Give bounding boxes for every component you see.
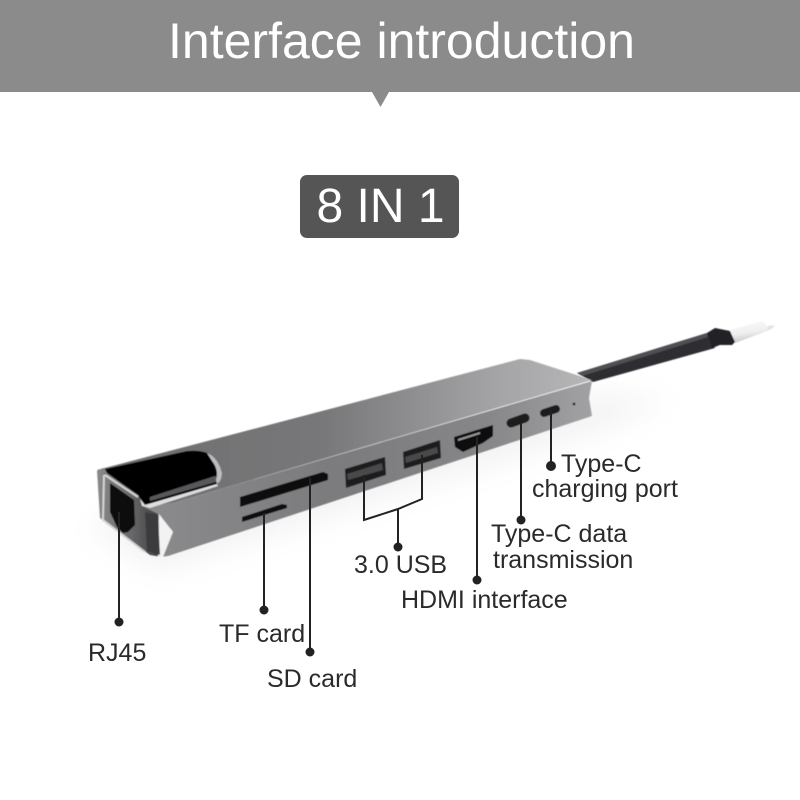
Type-C port data bbox=[511, 418, 525, 423]
label: SD card: SD card bbox=[267, 665, 357, 693]
header banner bbox=[0, 0, 800, 107]
hub body bbox=[97, 359, 592, 557]
white chamfer wedge bbox=[158, 514, 173, 557]
label: 3.0 USB: 3.0 USB bbox=[354, 551, 447, 579]
label: HDMI interface: HDMI interface bbox=[401, 586, 568, 614]
badge: 8 IN 1 bbox=[300, 175, 459, 238]
HDMI port bbox=[454, 425, 493, 452]
top face bbox=[97, 359, 592, 508]
RJ45 port bbox=[110, 483, 135, 533]
label: 3.0 USB bbox=[354, 455, 447, 579]
label: TF card: TF card bbox=[219, 620, 305, 648]
Type-C port charging bbox=[544, 409, 556, 413]
front face bbox=[143, 381, 592, 557]
silver port frame bbox=[103, 475, 145, 552]
header banner: Interface introduction bbox=[168, 13, 635, 69]
TF slot bbox=[242, 504, 287, 522]
label: SD card bbox=[267, 478, 357, 693]
label: HDMI interface bbox=[401, 437, 568, 614]
left end face bbox=[97, 468, 162, 557]
product: USB-C hub bbox=[90, 321, 774, 570]
USB port 1 bbox=[345, 457, 386, 488]
indicator light bbox=[573, 403, 575, 405]
lower lip of recess bbox=[140, 484, 218, 508]
badge: 8 IN 1: 8 IN 1 bbox=[316, 180, 445, 233]
label: Type-C data transmission bbox=[491, 423, 633, 574]
label: Type-C charging port: Type-C bbox=[561, 450, 642, 478]
dark end strip bbox=[145, 512, 160, 555]
USB port 2 bbox=[403, 440, 441, 469]
label: RJ45: RJ45 bbox=[88, 639, 146, 667]
recess highlight bbox=[150, 476, 219, 501]
label: RJ45 bbox=[88, 512, 146, 667]
label: TF card bbox=[219, 513, 305, 648]
label: Type-C data transmission: Type-C data bbox=[491, 520, 627, 548]
label: Type-C charging port bbox=[532, 410, 678, 503]
device shadow bbox=[90, 395, 670, 570]
label: Type-C charging port: charging port bbox=[532, 475, 678, 503]
SD slot bbox=[240, 472, 328, 507]
cable and USB-C plug bbox=[577, 321, 774, 382]
black recess bbox=[105, 451, 222, 505]
label: Type-C data transmission: transmission bbox=[493, 546, 633, 574]
